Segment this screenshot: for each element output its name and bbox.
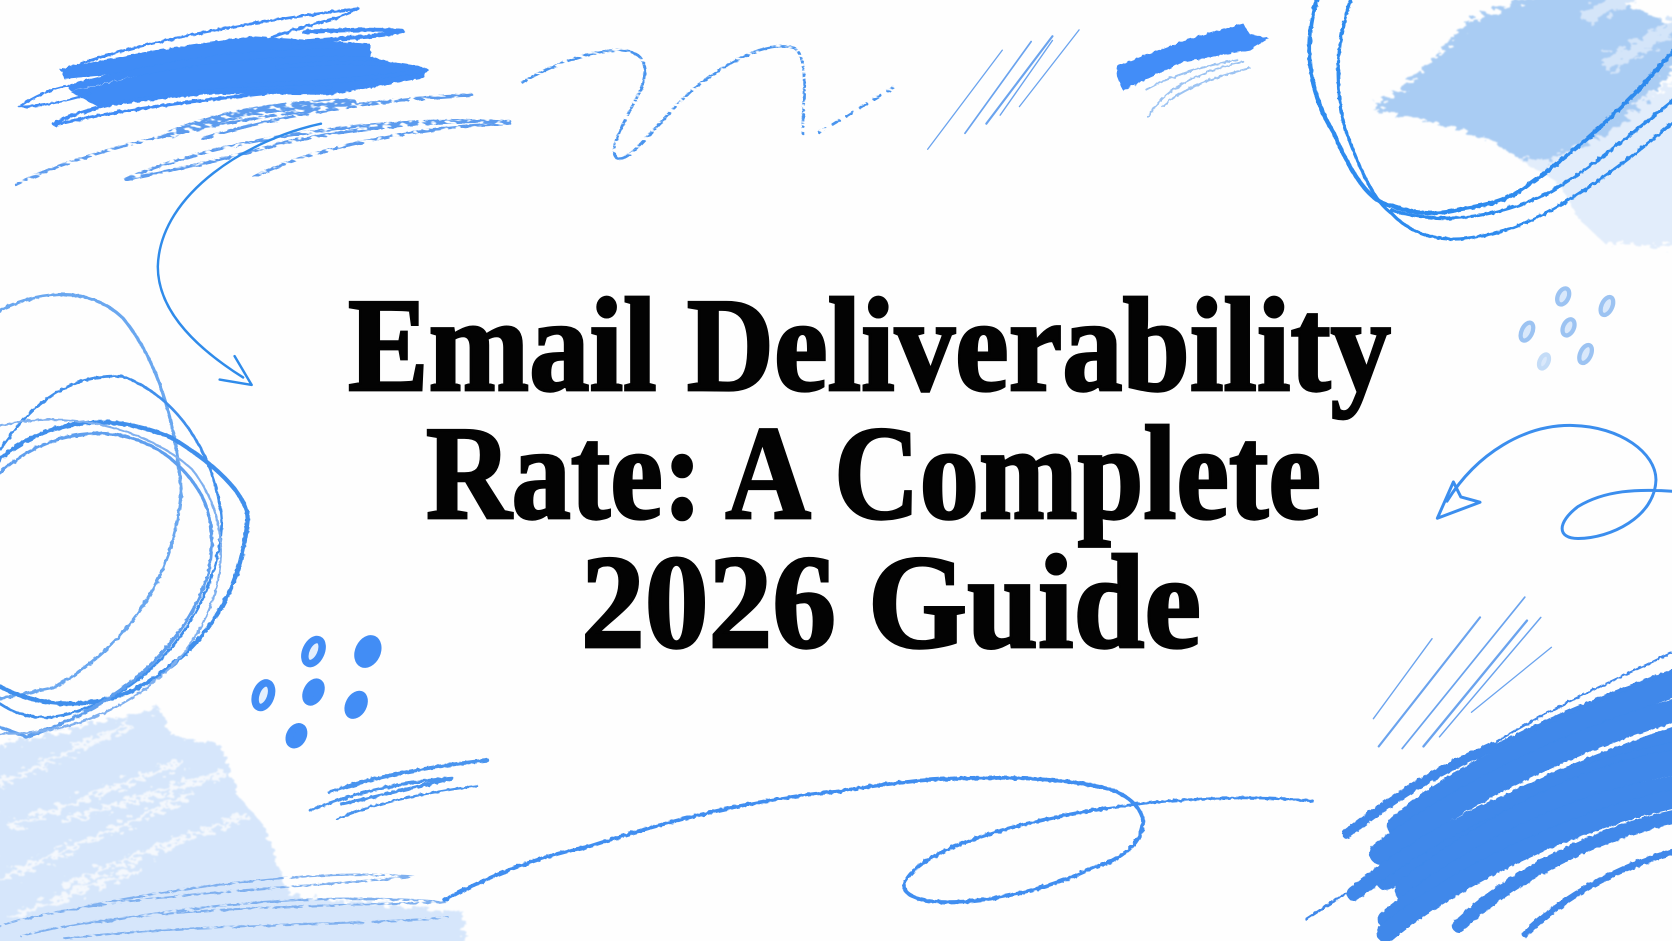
hollow dots: [252, 637, 326, 747]
dot cluster: left blue: [252, 631, 387, 747]
swoosh: long bottom curve with loop: [445, 778, 1313, 902]
dense marker mass: [62, 36, 425, 107]
arrow: curved arrow from top left: [158, 124, 321, 385]
wash: bottom left light blue: [0, 708, 464, 941]
title line 3: 2026 Guide: [581, 528, 1201, 676]
loops: top right circle: [1309, 0, 1672, 239]
scribble: bottom left pencil lines: [0, 875, 448, 938]
title line 1: Email Deliverability: [348, 271, 1391, 419]
hatch: bottom right diagonal lines: [1373, 597, 1551, 749]
title: [348, 271, 1391, 676]
scribble: bottom right dark marker: [1306, 653, 1672, 934]
marker stroke: top centre right: [1116, 23, 1269, 117]
hatch: top centre diagonal lines: [928, 30, 1079, 149]
dot cluster: right light blue: [1518, 286, 1616, 370]
loops: left circles: [0, 295, 248, 737]
wash: top right light blue: [1373, 0, 1672, 247]
strokes: bottom left short lines: [310, 760, 487, 819]
scribble: top left dark marker: [19, 9, 427, 125]
title line 2: Rate: A Complete: [426, 399, 1321, 547]
squiggle: top centre line: [522, 46, 894, 159]
arrow: right looping arrow: [1437, 425, 1672, 538]
scribble: top left pencil lines: [16, 95, 510, 184]
arrowhead: [220, 356, 252, 385]
arrowhead: [1437, 482, 1480, 518]
filled dots: [340, 631, 387, 723]
